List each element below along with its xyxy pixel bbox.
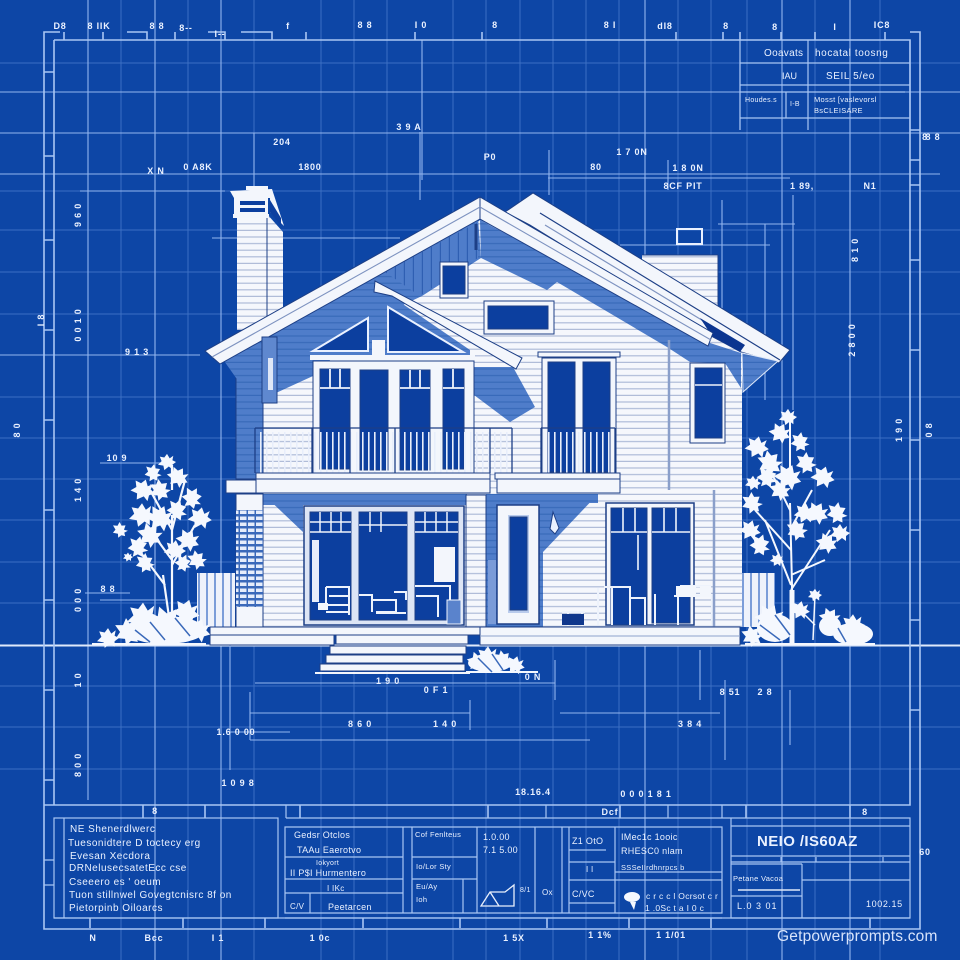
dimension labels: 8 8: [358, 20, 372, 30]
porch pillar: [466, 495, 486, 627]
dimension labels: 1 89,: [790, 181, 814, 191]
title block top right: Houdes.s: [745, 97, 777, 104]
wall lantern: [550, 512, 559, 534]
dimension labels: 80: [590, 162, 602, 172]
schedule table: C/V: [290, 902, 305, 911]
watermark: Getpowerprompts.com: [777, 928, 938, 945]
schedule table: [285, 827, 722, 918]
schedule table: C/VC: [572, 889, 595, 899]
lower gable with triangular windows: [262, 281, 522, 403]
dimension labels: 8 8: [101, 584, 115, 594]
schedule table: I I: [586, 865, 594, 874]
dimension labels: 8 0 0: [73, 753, 83, 777]
project title block: 1002.15: [866, 899, 903, 909]
schedule table: Io/Lor Sty: [416, 862, 451, 871]
dimension labels: I--: [215, 29, 225, 39]
title block top right: Ooavats: [764, 48, 803, 59]
notes panel: [44, 818, 278, 918]
dimension labels: 8 51: [720, 687, 740, 697]
left shrubs: [92, 596, 214, 651]
dimension labels: 1 9 0: [894, 418, 904, 442]
schedule table: 8/1: [520, 887, 531, 894]
dimension labels: 1 1/01: [656, 930, 686, 940]
right soffit shadow: [480, 220, 741, 388]
schedule table: Ox: [542, 888, 553, 897]
notes panel: NE Shenerdlwerc: [70, 824, 155, 835]
dimension labels: 0 N: [525, 672, 541, 682]
schedule table: IMec1c 1ooic: [621, 832, 678, 842]
schedule table: 7.1 5.00: [483, 845, 518, 855]
dimension labels: 8 I: [604, 20, 616, 30]
balcony slab: [226, 473, 620, 493]
project title block: L.0 3 01: [737, 901, 778, 911]
dimension labels: 0 0 0 1 8 1: [620, 789, 672, 799]
middle shrub: [464, 646, 538, 676]
dimension labels: 1 5X: [503, 933, 525, 943]
dimension labels: 10 9: [107, 453, 127, 463]
notes panel: Tuon stillnwel Govegtcnisrc 8f on: [69, 890, 232, 901]
dimension labels: 8: [862, 807, 868, 817]
title strip lines: [54, 805, 910, 918]
schedule table: Cof Fenlteus: [415, 830, 461, 839]
dimension labels: 8: [152, 806, 158, 816]
title block top right: SEIL 5/eo: [826, 71, 875, 82]
left gable soffit shadow: [222, 218, 481, 398]
side wall in shadow: [236, 375, 263, 479]
dimension labels: Bcc: [145, 933, 163, 943]
dimension labels: 8 IIK: [87, 21, 111, 31]
dimension labels: I 1: [212, 933, 224, 943]
balcony railing: [255, 428, 615, 473]
dimension labels: 18.16.4: [515, 787, 551, 797]
dimension labels: 0 0 1 0: [73, 308, 83, 342]
chimney: [230, 186, 284, 330]
downpipe: [669, 340, 714, 627]
schedule table: SSSeIIrdhnrpcs b: [621, 863, 685, 872]
dimension labels: 9 1 3: [125, 347, 149, 357]
dimension labels: 0 A8K: [183, 162, 213, 172]
schedule table: Peetarcen: [328, 902, 372, 912]
project title block: NEIO /IS60AZ: [757, 833, 858, 850]
notes panel: Cseeero es ' oeum: [69, 877, 161, 888]
schedule table: Gedsr Otclos: [294, 830, 350, 840]
dimension labels: 8: [723, 21, 729, 31]
schedule table: Z1 OtO: [572, 836, 603, 846]
dimension labels: 204: [273, 137, 291, 147]
title block top right: Mosst [vaslevorsl: [814, 95, 877, 104]
dimension labels: 1 0: [73, 673, 83, 687]
dimension labels: 8: [492, 20, 498, 30]
right tree: [737, 409, 851, 643]
dimension labels: 1 4 0: [73, 478, 83, 502]
dimension labels: 8: [922, 132, 928, 142]
dimension labels: 0 8: [924, 423, 934, 437]
dimension labels: 1 0c: [310, 933, 330, 943]
front door: [488, 505, 539, 624]
dimension labels: 1.6 0 00: [217, 727, 255, 737]
dimension labels: 1 1%: [588, 930, 612, 940]
dimension labels: 8--: [179, 23, 193, 33]
dimension labels: 0 0 0: [73, 588, 83, 612]
schedule table: Ioh: [416, 895, 427, 904]
title block top right: hocatal toosng: [815, 48, 888, 59]
dimension labels: 1 0 9 8: [221, 778, 255, 788]
right shrubs: [737, 589, 875, 651]
right upper window: [690, 363, 725, 443]
dimension labels: Dcf: [602, 807, 619, 817]
ground floor french doors: [606, 503, 694, 625]
balcony doors right: [538, 352, 620, 474]
project title block: Petane Vacoa: [733, 874, 784, 883]
fences: [197, 573, 775, 627]
dimension labels: X N: [147, 166, 165, 176]
notes panel: Evesan Xecdora: [70, 851, 150, 862]
upper gable board siding: [385, 222, 478, 296]
dimension labels: 1 9 0: [376, 676, 400, 686]
title block top right: BsCLEISARE: [814, 106, 863, 115]
notes panel: Tuesonidtere D toctecy erg: [68, 838, 201, 849]
ground floor furniture: [318, 585, 461, 624]
schedule table: 1.0.00: [483, 832, 510, 842]
dimension labels: N: [89, 933, 97, 943]
house walls with siding: [263, 220, 742, 627]
dimension labels: 8 1 0: [850, 238, 860, 262]
schedule table: II P$I Hurmentero: [290, 868, 366, 878]
dimension labels: 1800: [298, 162, 322, 172]
left tree: [109, 454, 214, 617]
dimension labels: 3 8 4: [678, 719, 702, 729]
title block top right: IAU: [782, 71, 797, 81]
dimension labels: I 8: [36, 314, 46, 326]
notes panel: DRNelusecsatetEcc cse: [69, 863, 187, 874]
dimension labels: 9 6 0: [73, 203, 83, 227]
dimension labels: 8 8: [150, 21, 164, 31]
dimension labels: 8 0: [12, 423, 22, 437]
schedule table: c r c c l Ocrsot c r: [646, 891, 718, 901]
balcony doors left: [313, 361, 474, 475]
dimension labels: D8: [53, 21, 67, 31]
dimension labels: 1 7 0N: [616, 147, 648, 157]
dimension labels: 60: [919, 847, 931, 857]
dimension labels: 2 8 0 0: [847, 323, 857, 357]
notes panel: Pietorpinb Oiloarcs: [69, 903, 163, 914]
ground line: [0, 644, 960, 646]
wide upper window: [484, 301, 554, 334]
porch chairs and table: [562, 586, 712, 626]
dimension labels: 1 4 0: [433, 719, 457, 729]
dimension labels: I: [833, 22, 837, 32]
dimension labels: N1: [863, 181, 877, 191]
lower level shadow bands: [263, 494, 598, 627]
brick panel and left base: [236, 494, 263, 627]
dimension labels: 8 8: [926, 132, 940, 142]
dimension labels: 3 9 A: [396, 122, 422, 132]
dimension labels: I 0: [415, 20, 427, 30]
dimension labels: IC8: [874, 20, 890, 30]
back roof: [505, 193, 790, 392]
dimension labels: 8 6 0: [348, 719, 372, 729]
dimension labels: f: [286, 21, 290, 31]
dimension labels: dI8: [657, 21, 673, 31]
dimension labels: 8CF PIT: [663, 181, 703, 191]
dimension labels: 0 F 1: [424, 685, 448, 695]
mini chart in schedule table: [481, 885, 514, 906]
dimension labels: P0: [484, 152, 496, 162]
compass icon: [624, 892, 640, 910]
porch base and steps: [210, 627, 740, 674]
title block top right: [740, 40, 910, 130]
dimension labels: 1 8 0N: [672, 163, 704, 173]
schedule table: I IKc: [327, 884, 345, 893]
front main roof: [205, 197, 713, 364]
ground floor sliding doors: [304, 506, 464, 625]
back building block: [642, 229, 718, 315]
dimension labels: 8: [772, 22, 778, 32]
schedule table: RHESC0 nlam: [621, 846, 683, 856]
upper small window: [440, 262, 468, 298]
title block top right: I-B: [790, 101, 800, 108]
small gable wall shadow: [470, 367, 535, 422]
schedule table: 1 .0Sc t a I 0 c: [645, 903, 705, 913]
schedule table: TAAu Eaerotvo: [297, 845, 361, 855]
dimension labels: 2 8: [758, 687, 772, 697]
schedule table: Eu/Ay: [416, 882, 437, 891]
schedule table: Iokyort: [316, 860, 339, 867]
dimension lines around the house: [80, 60, 795, 770]
project title block: [731, 818, 910, 918]
